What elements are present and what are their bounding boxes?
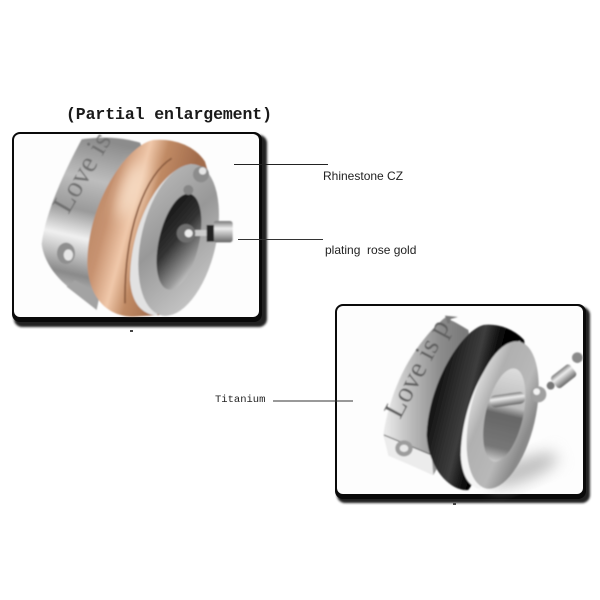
leader line: plating	[238, 238, 323, 240]
ring opening	[148, 189, 210, 294]
label: plating: plating rose gold	[325, 243, 416, 257]
photo: rose gold ring	[42, 127, 233, 324]
leader line: titanium	[273, 400, 353, 402]
front steel ring	[461, 341, 533, 489]
panel frame	[335, 304, 590, 503]
rose gold band	[87, 140, 213, 317]
black band	[427, 325, 533, 490]
title: (Partial enlargement)	[66, 105, 272, 124]
rhinestone	[395, 440, 413, 456]
ring opening	[475, 364, 533, 466]
frame mark	[130, 330, 133, 332]
panel: rose gold ring photo	[12, 127, 267, 332]
engraved text: Love is	[47, 127, 118, 218]
top pin	[445, 316, 458, 323]
label: titanium: Titanium	[215, 394, 265, 406]
rhinestone	[57, 243, 75, 264]
front steel ring	[130, 164, 200, 316]
engraved text: Love is p	[378, 314, 456, 423]
connecting pin	[213, 221, 233, 242]
frame mark	[453, 503, 456, 505]
panel: black ring photo	[335, 304, 590, 505]
top screw	[193, 166, 209, 182]
leader line: rhinestone	[234, 164, 328, 166]
photo: black ring	[378, 314, 583, 496]
label: rhinestone: Rhinestone CZ	[323, 169, 403, 183]
chain	[489, 391, 526, 408]
panel frame	[12, 132, 267, 327]
